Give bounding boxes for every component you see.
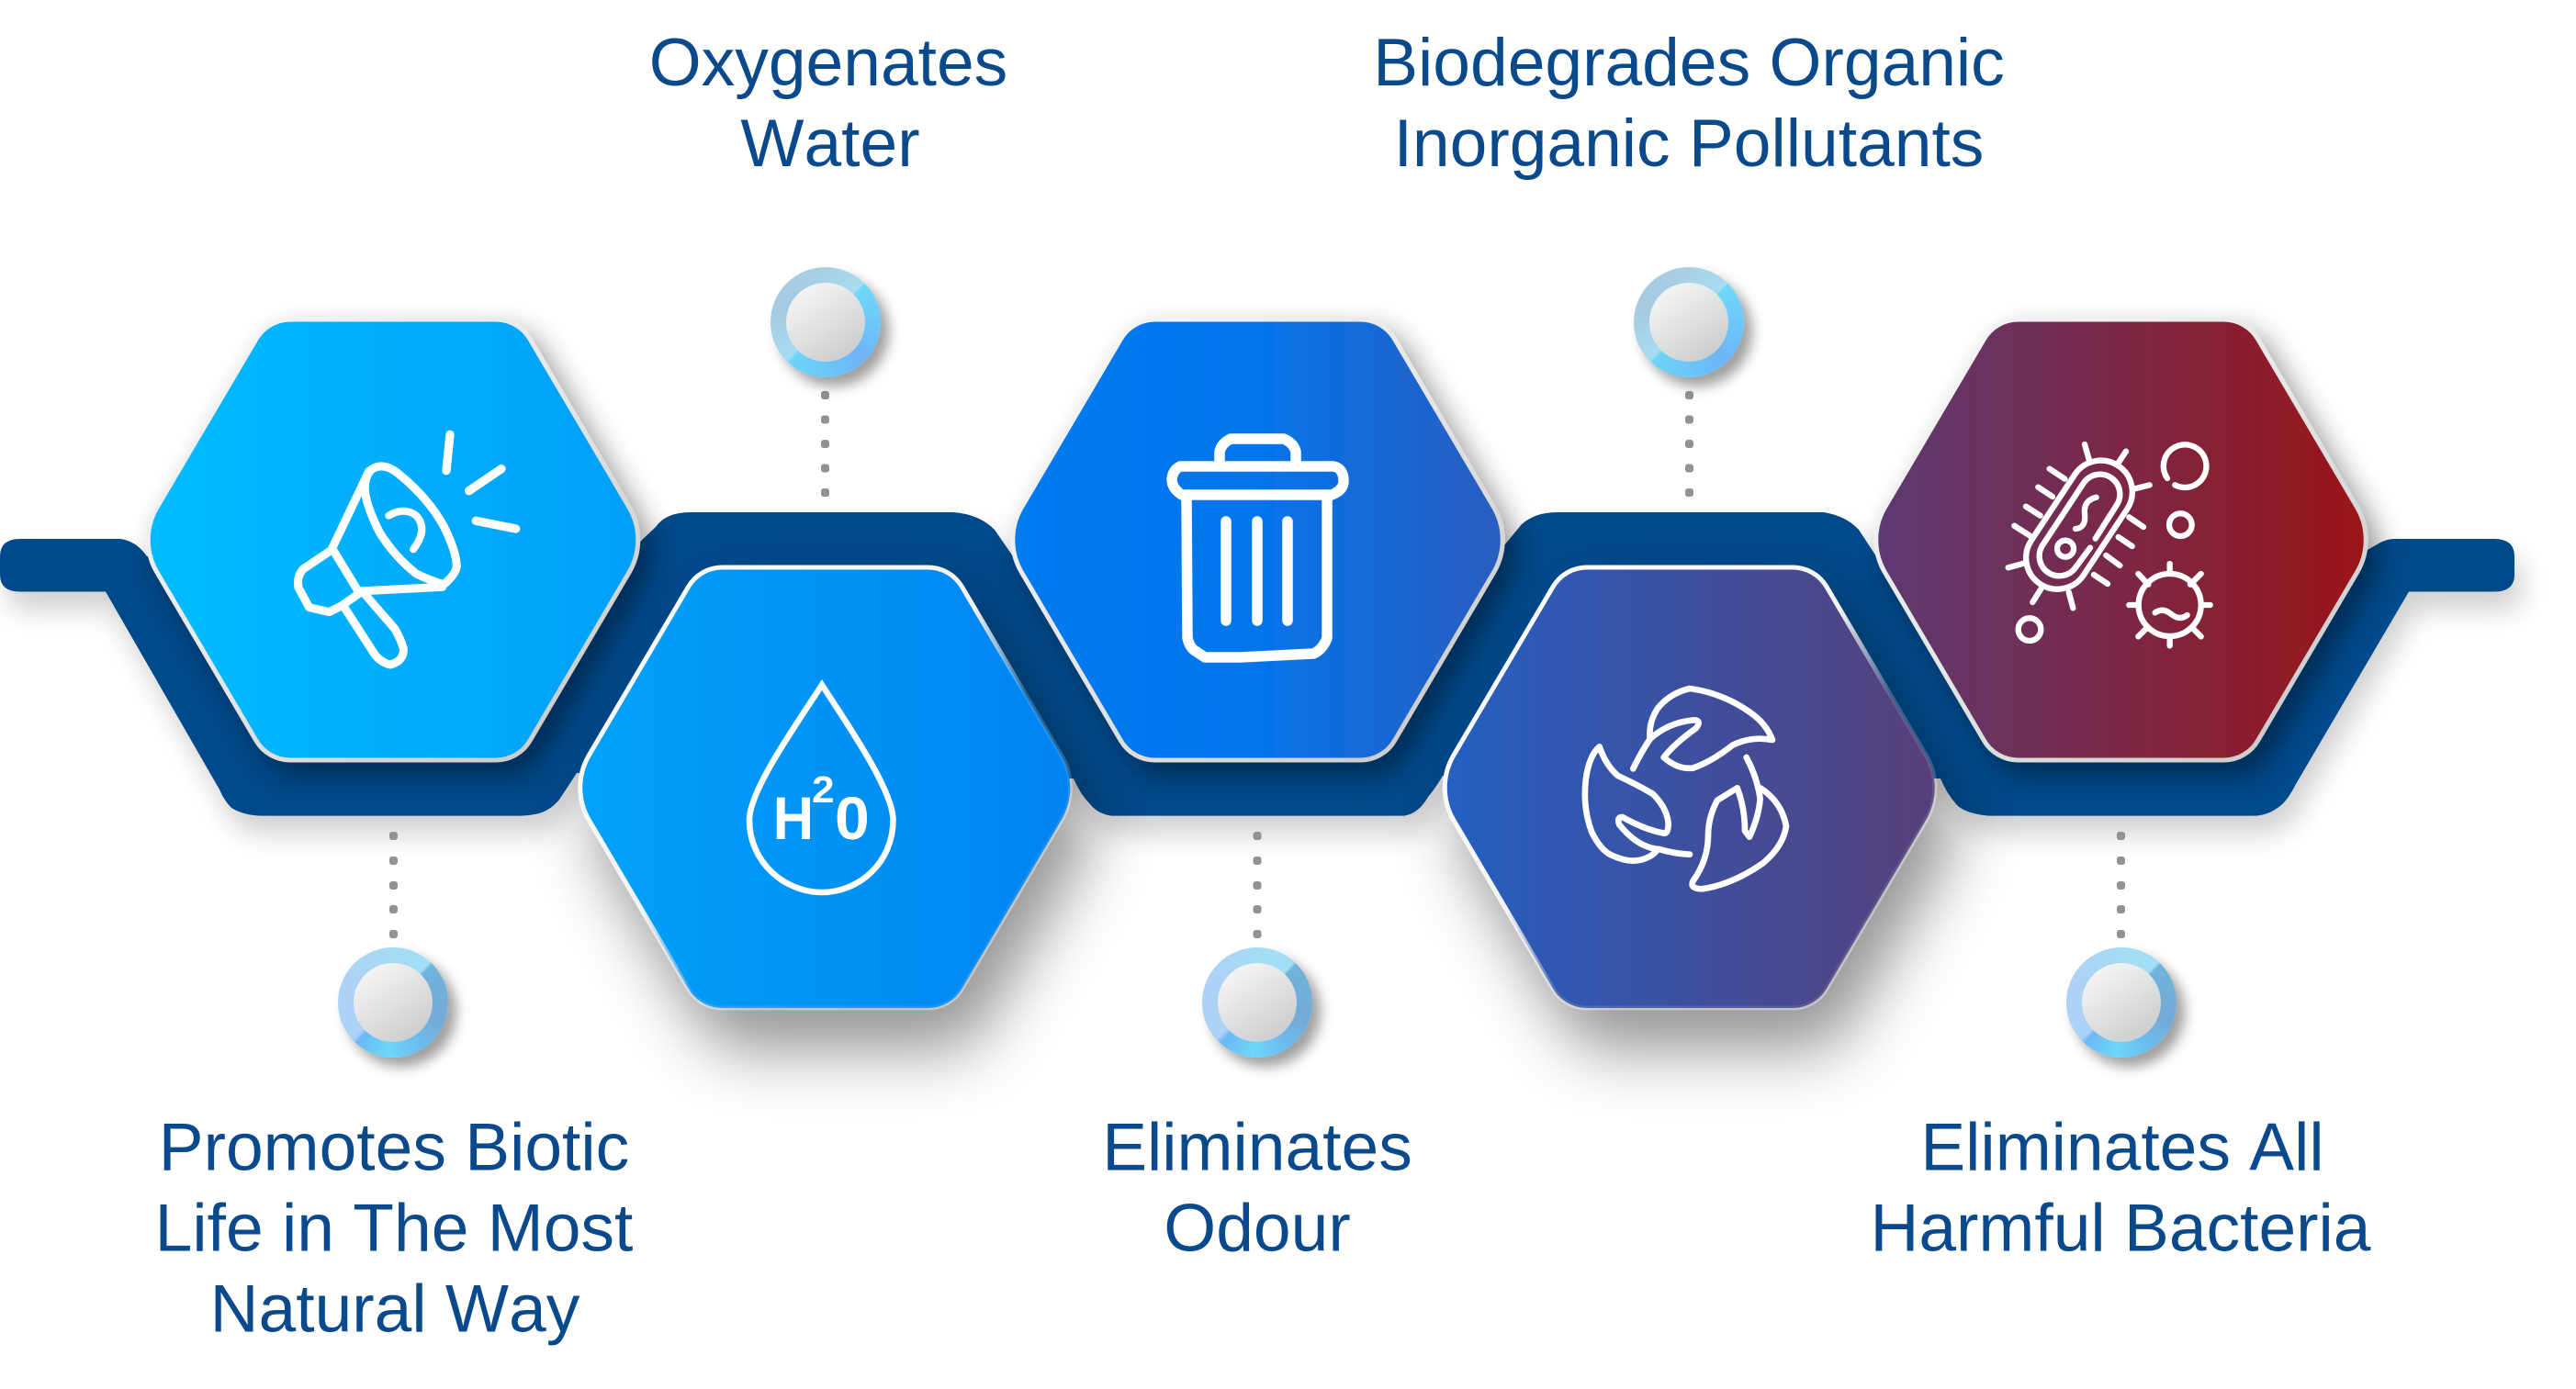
ribbon: dark blue zigzag band bbox=[0, 512, 2514, 816]
label: oxygenates water: Water bbox=[740, 106, 920, 181]
icon: megaphone bbox=[298, 434, 516, 665]
icon: water drop with H2O: 2 bbox=[812, 768, 835, 812]
hexagon 2: oxygenates water bbox=[580, 567, 1070, 1008]
node: hexagon 5 marker bbox=[2066, 947, 2177, 1058]
label: biodegrades organic inorganic pollutants: Biodegrades Organic bbox=[1373, 25, 2005, 100]
hexagon 4: biodegrades pollutants bbox=[1445, 567, 1935, 1008]
label: promotes biotic life: Natural Way bbox=[210, 1271, 580, 1346]
icon: water drop with H2O: H bbox=[773, 784, 814, 852]
hexagon 5: eliminates harmful bacteria bbox=[1876, 319, 2366, 760]
node: hexagon 2 marker bbox=[771, 267, 881, 377]
dotted connector: hexagon 3 bbox=[1253, 832, 1262, 938]
label: promotes biotic life bbox=[155, 1109, 633, 1346]
label: promotes biotic life: Promotes Biotic bbox=[159, 1109, 629, 1184]
hexagon 3: eliminates odour bbox=[1013, 319, 1502, 760]
label: eliminates harmful bacteria bbox=[1870, 1109, 2371, 1265]
dotted connector: hexagon 1 bbox=[389, 832, 398, 938]
icon: water drop with H2O: 0 bbox=[835, 785, 870, 853]
dotted connector: hexagon 2 bbox=[821, 391, 829, 497]
node: hexagon 3 marker bbox=[1202, 947, 1312, 1058]
icon: trash bin bbox=[1172, 439, 1344, 657]
label: biodegrades organic inorganic pollutants bbox=[1373, 25, 2005, 181]
label: eliminates odour bbox=[1102, 1109, 1412, 1265]
node: hexagon 1 marker bbox=[338, 947, 448, 1058]
icon: water drop with H2O bbox=[749, 685, 893, 892]
dotted connector: hexagon 4 bbox=[1685, 391, 1693, 497]
node: hexagon 4 marker bbox=[1634, 267, 1744, 377]
label: eliminates harmful bacteria: Eliminates All bbox=[1920, 1109, 2324, 1184]
icon: bacteria bbox=[2008, 444, 2210, 645]
label: promotes biotic life: Life in The Most bbox=[155, 1190, 633, 1265]
label: oxygenates water: Oxygenates bbox=[649, 25, 1007, 100]
dotted connector: hexagon 5 bbox=[2117, 832, 2125, 938]
label: eliminates odour: Eliminates bbox=[1102, 1109, 1412, 1184]
label: oxygenates water bbox=[649, 25, 1007, 181]
label: eliminates harmful bacteria: Harmful Bacteria bbox=[1870, 1190, 2371, 1265]
icon: recycling leaves bbox=[1585, 689, 1786, 889]
label: eliminates odour: Odour bbox=[1164, 1190, 1351, 1265]
hexagon 1: promotes biotic life bbox=[148, 319, 638, 760]
label: biodegrades organic inorganic pollutants: Inorganic Pollutants bbox=[1394, 106, 1984, 181]
